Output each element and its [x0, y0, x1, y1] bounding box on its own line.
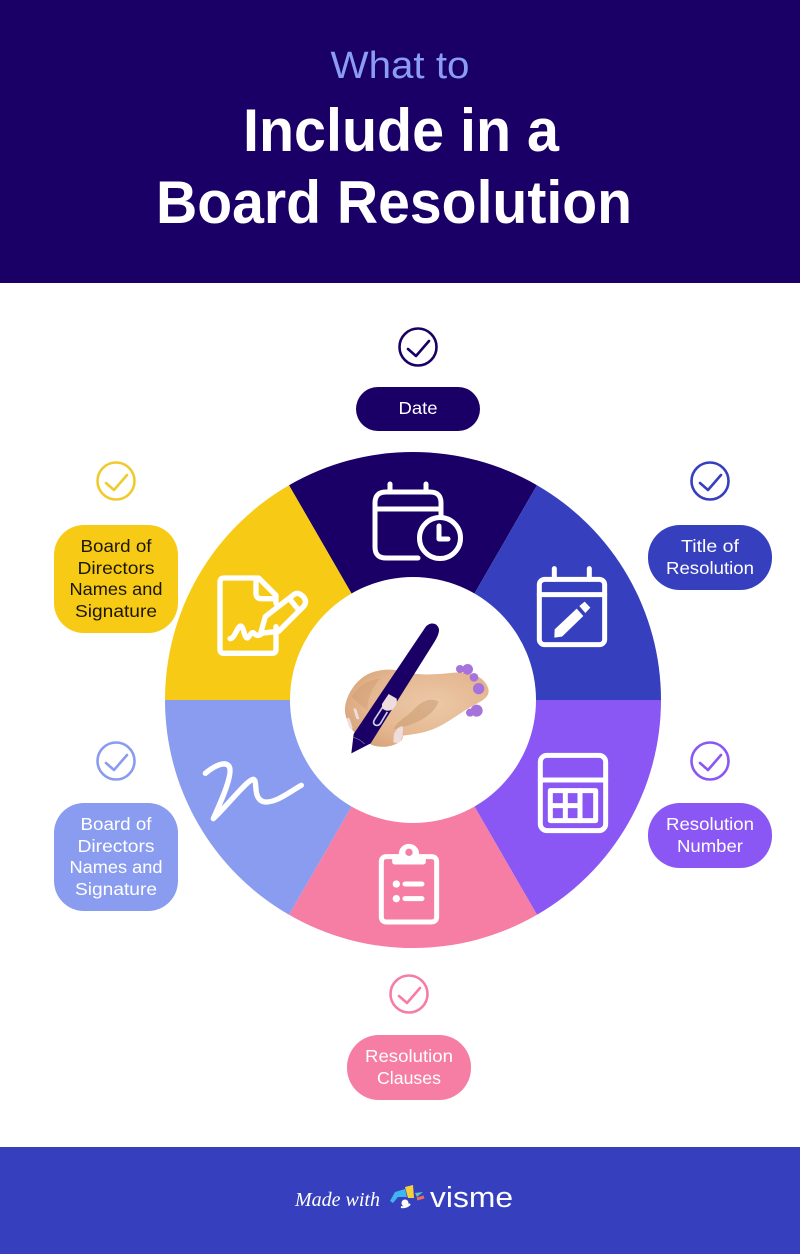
icon: calendar with clock [375, 484, 460, 558]
check icon [390, 976, 428, 1012]
signature pill: Directors [78, 836, 155, 856]
title: include in a board resolution: Board Resolution [156, 169, 632, 236]
title pill: Title of [681, 536, 739, 556]
fingernails [382, 694, 397, 711]
check icon [98, 462, 134, 500]
item: signature, periwinkle [54, 742, 178, 911]
hand [345, 670, 489, 747]
board pill: Signature [75, 601, 157, 621]
icon: calendar with pencil [539, 569, 605, 645]
board pill [54, 525, 178, 633]
item: resolution number [648, 742, 772, 868]
title: what to: What to [330, 45, 470, 87]
item: resolution clauses [347, 976, 471, 1100]
check icon [692, 742, 728, 780]
center circle [290, 577, 536, 823]
icon: signature scribble [205, 764, 301, 819]
board pill: Names and [70, 579, 162, 599]
board pill: Directors [78, 558, 155, 578]
clauses pill [347, 1035, 471, 1100]
signature pill: Board of [80, 814, 152, 834]
pen clip [374, 705, 387, 725]
signature pill [54, 803, 178, 911]
pen [351, 624, 439, 753]
header band [0, 0, 800, 283]
wedge: resolution number [413, 700, 661, 915]
number pill: Number [677, 836, 743, 856]
check icon [692, 462, 728, 500]
bracelet [456, 664, 484, 717]
number pill [648, 803, 772, 868]
visme logo [390, 1182, 513, 1214]
check icon [400, 328, 436, 366]
wedge: date [289, 452, 537, 700]
wheel [165, 452, 661, 948]
wedge: signature [165, 700, 413, 915]
illustration: hand holding pen [345, 624, 489, 753]
item: title of resolution [648, 462, 772, 590]
signature pill: Signature [75, 879, 157, 899]
footer band [0, 1147, 800, 1254]
date pill: Date [398, 398, 438, 418]
wedge: title of resolution [413, 485, 661, 700]
title pill [648, 525, 772, 590]
item: date [356, 328, 480, 431]
icon: signed document with pen [220, 578, 306, 653]
number pill: Resolution [666, 814, 754, 834]
made with text: Made with [294, 1189, 380, 1211]
icon: calculator table [540, 755, 606, 831]
title: include in a board resolution: Include in a [243, 97, 560, 164]
clauses pill: Clauses [377, 1068, 441, 1088]
item: board of directors, yellow [54, 462, 178, 633]
clauses pill: Resolution [365, 1046, 453, 1066]
title: include in a board resolution [156, 97, 632, 236]
visme logo: visme [430, 1182, 513, 1214]
board pill: Board of [80, 536, 152, 556]
title pill: Resolution [666, 558, 754, 578]
signature pill: Names and [70, 857, 162, 877]
wedge: board of directors [165, 485, 413, 700]
icon: clipboard checklist [381, 846, 437, 922]
check icon [98, 742, 134, 780]
wedge: resolution clauses [289, 700, 537, 948]
